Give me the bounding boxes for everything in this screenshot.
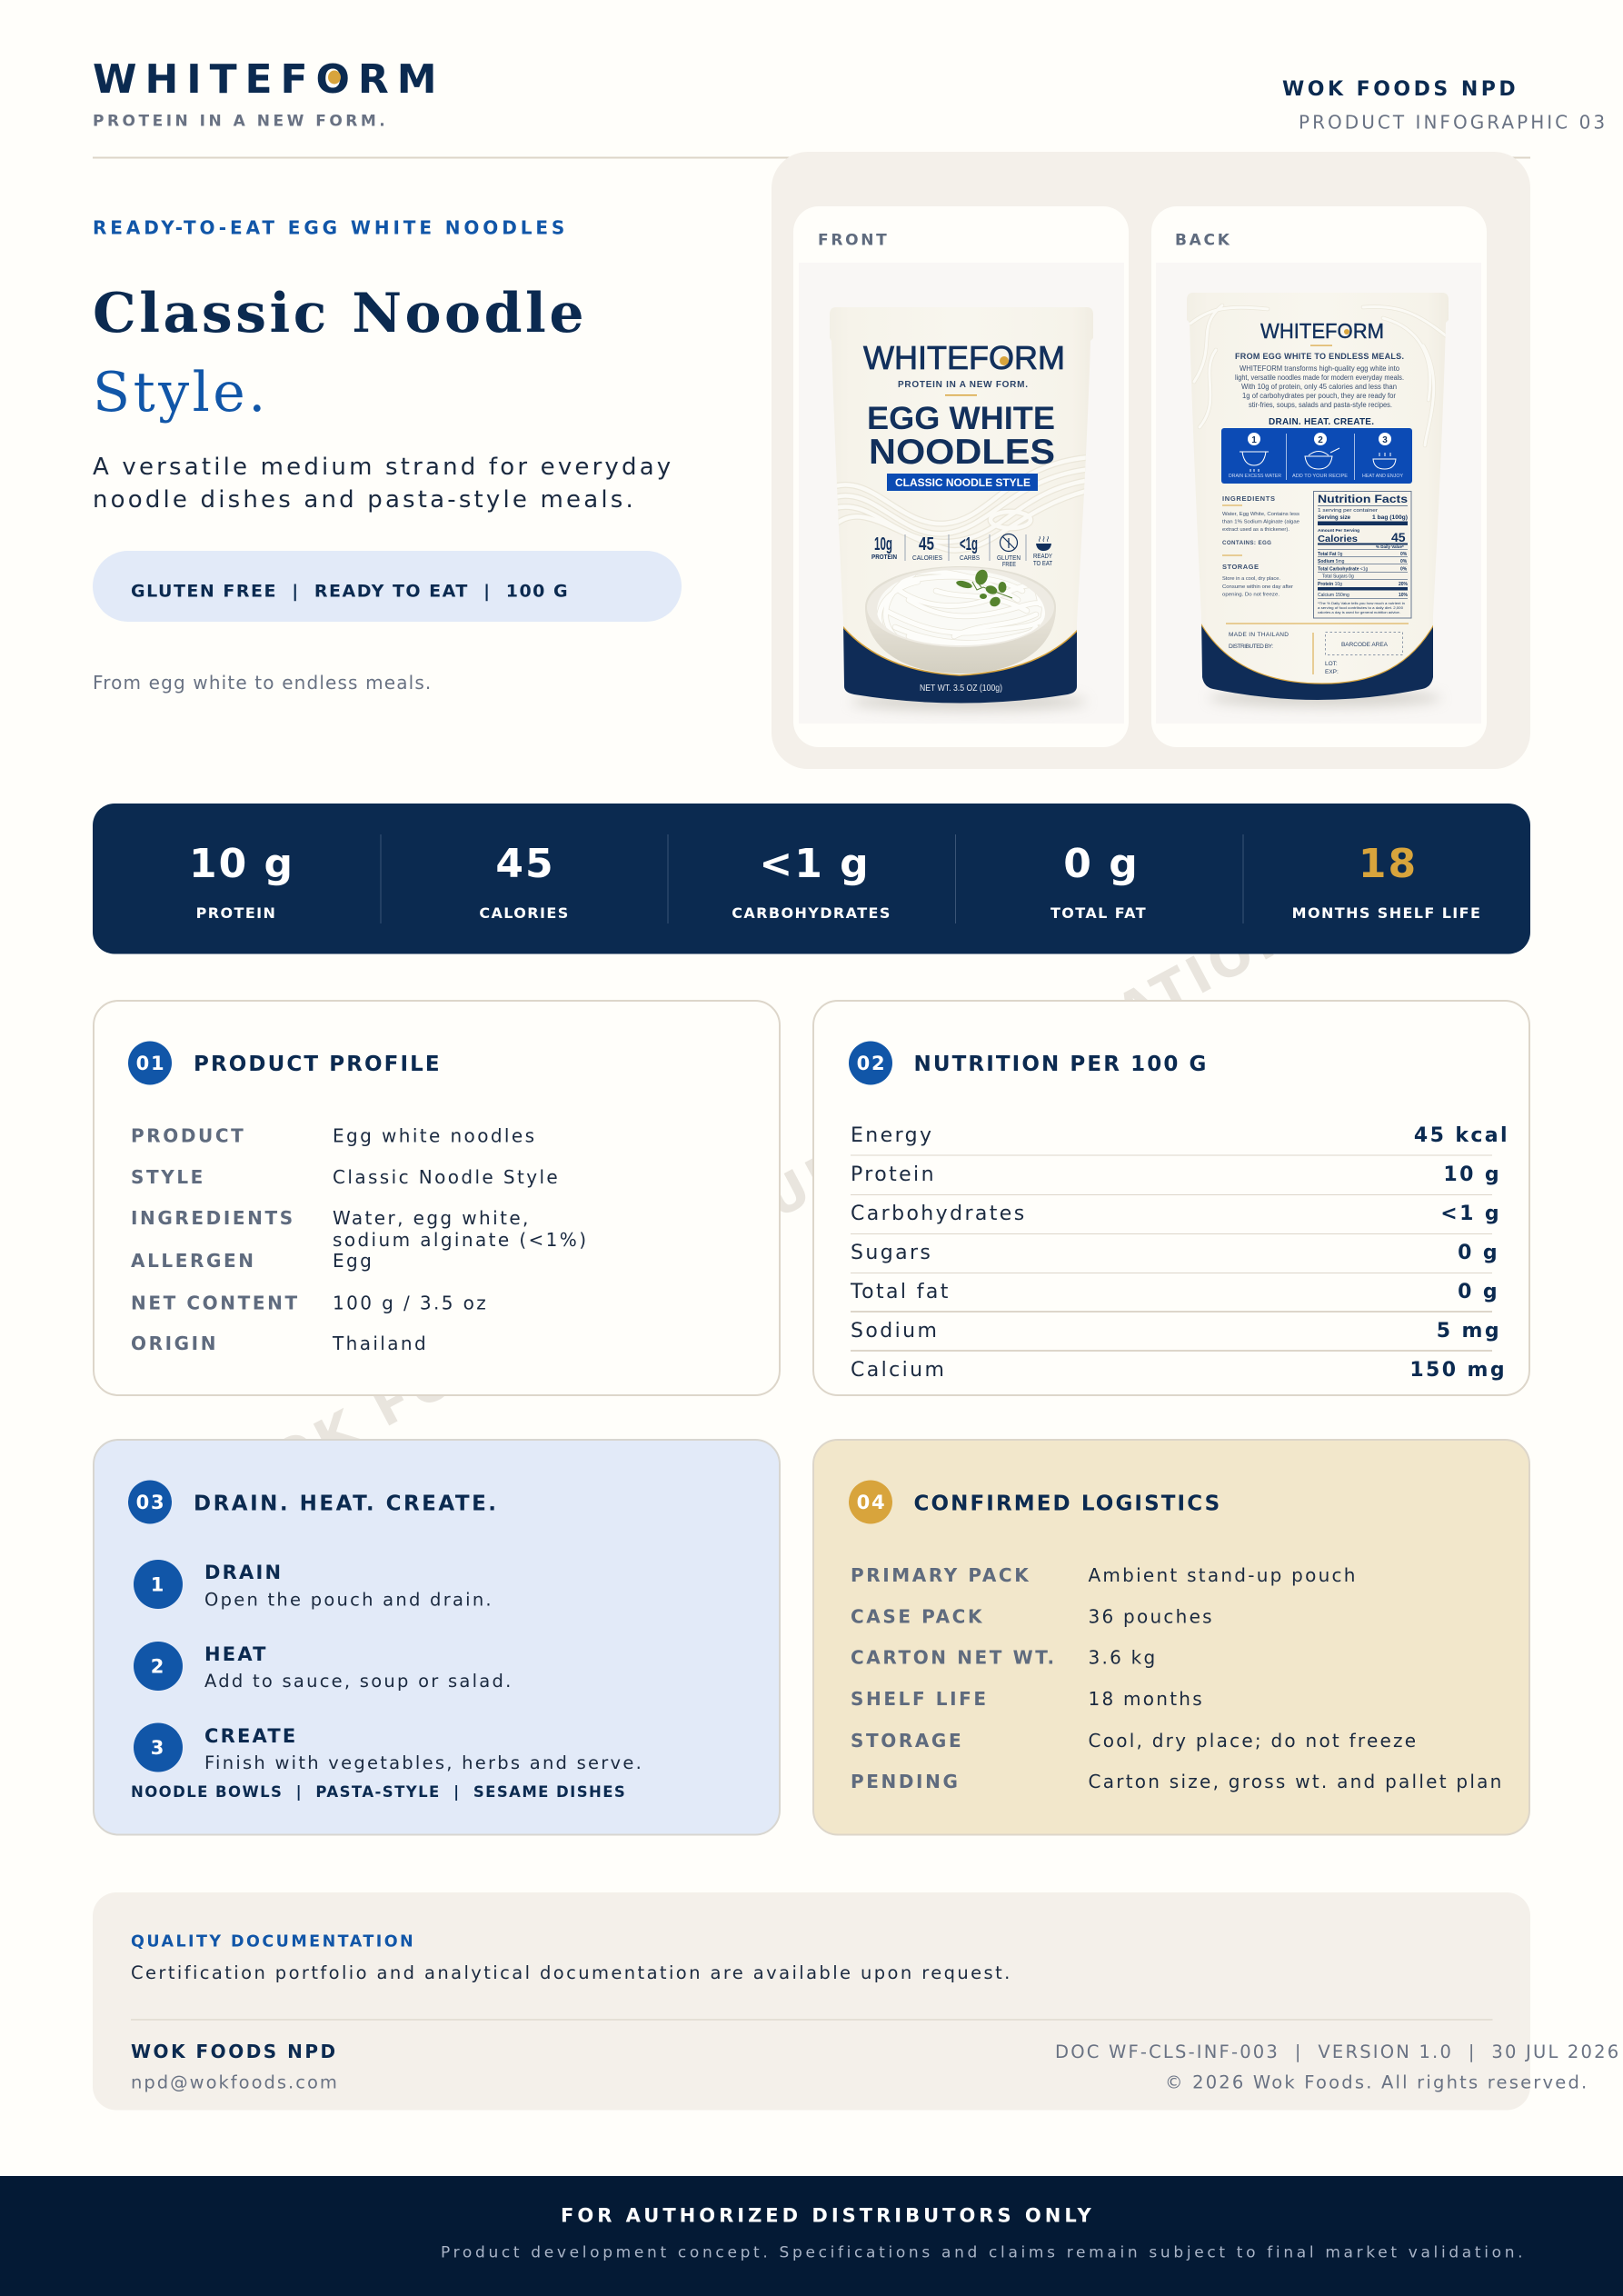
nutrition table: <1 g	[1440, 1203, 1501, 1225]
nutrition facts mini label: 45	[1391, 530, 1406, 544]
nutrition facts mini label	[1314, 491, 1411, 618]
icon: back pouch: 2	[1318, 435, 1323, 445]
logistics rows: Carton size, gross wt. and pallet plan	[1089, 1771, 1504, 1792]
spec rows: PRODUCT	[131, 1125, 245, 1147]
nutrition facts mini label: 10%	[1399, 593, 1409, 598]
stat: protein: 10 g	[189, 841, 294, 887]
nutrition table: Total fat	[850, 1281, 951, 1303]
noodle waves	[831, 457, 1090, 550]
nutrition table: 0 g	[1458, 1281, 1499, 1303]
ingredients: CONTAINS: EGG	[1222, 540, 1271, 546]
ingredients: Store in a cool, dry place.	[1222, 576, 1280, 582]
logistics rows: PRIMARY PACK	[851, 1564, 1031, 1586]
icon: back pouch: MADE IN THAILAND	[1229, 632, 1289, 638]
document meta	[1055, 2041, 1620, 2092]
section label: QUALITY DOCUMENTATION	[131, 1932, 415, 1951]
nutrition facts mini label: Sodium 5mg	[1318, 559, 1345, 564]
icon: front pouch: NET WT. 3.5 OZ (100g)	[920, 683, 1002, 694]
ingredients	[1222, 494, 1299, 598]
nutrition facts mini label: Calcium 150mg	[1318, 593, 1349, 598]
contact: WOK FOODS NPD	[131, 2041, 338, 2062]
ingredients: INGREDIENTS	[1222, 494, 1275, 503]
nutrition facts mini label: Total Carbohydrate <1g	[1318, 567, 1369, 573]
nutrition table: 10 g	[1443, 1163, 1501, 1186]
step 3: 3	[151, 1737, 165, 1759]
logistics rows: 36 pouches	[1089, 1605, 1214, 1627]
badge 03	[128, 1480, 172, 1523]
ingredients: extract used as a thickener).	[1222, 527, 1289, 533]
card: back	[1151, 206, 1487, 747]
icon: front pouch	[822, 300, 1100, 718]
icon: back pouch: WHITEFORM transforms high-quality egg white into	[1240, 364, 1400, 373]
icon: back pouch: DRAIN EXCESS WATER	[1229, 474, 1281, 479]
bowl of noodles	[865, 566, 1056, 674]
ingredients: Water, Egg White, Contains less	[1222, 512, 1299, 517]
claims strip: GLUTEN	[997, 555, 1021, 562]
card: back: BACK	[1175, 231, 1232, 249]
step 1: 1	[151, 1574, 165, 1596]
stat: total fat: TOTAL FAT	[1050, 904, 1147, 922]
nutrition facts mini label: % Daily Value*	[1376, 544, 1404, 549]
logistics rows: Cool, dry place; do not freeze	[1089, 1730, 1418, 1752]
spec rows: INGREDIENTS	[131, 1207, 295, 1229]
panel: 01 product profile	[94, 1001, 780, 1395]
stat: protein	[189, 841, 294, 922]
herb garnish	[955, 568, 1012, 608]
icon: back pouch: ADD TO YOUR RECIPE	[1292, 474, 1349, 479]
hero text block: noodle dishes and pasta-style meals.	[93, 486, 636, 514]
nutrition facts mini label: Protein 10g	[1318, 582, 1342, 587]
icon: back pouch	[1181, 286, 1454, 718]
navy base	[843, 627, 1077, 704]
stat: shelf life: MONTHS SHELF LIFE	[1292, 904, 1481, 922]
preparation strip	[1221, 428, 1412, 484]
icon: front pouch: EGG WHITE	[867, 401, 1055, 436]
ingredients: Consume within one day after	[1222, 584, 1293, 590]
nutrition facts mini label: 0%	[1400, 559, 1408, 564]
spec rows: 100 g / 3.5 oz	[333, 1293, 488, 1314]
step 1	[134, 1560, 493, 1611]
logistics rows: 3.6 kg	[1089, 1647, 1157, 1669]
watermark: WOK FOODS NPD SUPPORT NOTATION	[209, 898, 1309, 1521]
wordmark: WHITEFORM	[93, 56, 444, 103]
stat: calories: 45	[495, 841, 555, 887]
nutrition facts mini label: Total Sugars 0g	[1322, 574, 1354, 580]
hero text block: Style.	[93, 361, 269, 424]
heading: NUTRITION PER 100 G	[914, 1053, 1209, 1076]
step 1: Open the pouch and drain.	[204, 1589, 493, 1611]
document meta: © 2026 Wok Foods. All rights reserved.	[1165, 2072, 1588, 2092]
logistics rows	[851, 1564, 1504, 1792]
step 3: CREATE	[204, 1725, 297, 1747]
logistics rows: CASE PACK	[851, 1605, 984, 1627]
nutrition facts mini label: Nutrition Facts	[1318, 493, 1408, 505]
spec rows: Water, egg white,	[333, 1207, 531, 1229]
brand: WHITEFORM	[863, 339, 1065, 376]
spec rows: Egg white noodles	[333, 1125, 536, 1147]
logistics rows: PENDING	[851, 1771, 960, 1792]
badge 01: 01	[136, 1053, 165, 1074]
nutrition facts mini label: Serving size	[1318, 514, 1351, 521]
heading: PRODUCT PROFILE	[194, 1053, 442, 1076]
claims strip: PROTEIN	[871, 554, 897, 561]
claims strip	[871, 534, 1053, 568]
logistics rows: CARTON NET WT.	[851, 1647, 1057, 1669]
ingredients: opening. Do not freeze.	[1222, 593, 1279, 598]
claims strip: 10g	[874, 534, 892, 554]
step 3: Finish with vegetables, herbs and serve.	[204, 1752, 643, 1773]
stats bar	[93, 804, 1530, 954]
icon: back pouch: DISTRIBUTED BY:	[1229, 644, 1273, 650]
ingredients: than 1% Sodium Alginate (algae	[1222, 520, 1299, 525]
claims strip: READY	[1033, 554, 1052, 560]
stat: calories: CALORIES	[479, 904, 570, 922]
stat: carbohydrates	[732, 841, 891, 922]
nutrition table: 5 mg	[1437, 1320, 1501, 1343]
small note: From egg white to endless meals.	[93, 672, 432, 694]
nutrition facts mini label: calories a day is used for general nutrition advice.	[1318, 611, 1400, 614]
nutrition table: 0 g	[1458, 1242, 1499, 1264]
spec rows: ORIGIN	[131, 1333, 218, 1354]
badge 02: 02	[857, 1053, 886, 1074]
step 2: 2	[151, 1656, 165, 1678]
icon: back pouch: DRAIN. HEAT. CREATE.	[1269, 417, 1374, 427]
card: front	[793, 206, 1129, 747]
usage tags: NOODLE BOWLS | PASTA-STYLE | SESAME DISHES	[131, 1783, 626, 1802]
spec rows: Egg	[333, 1250, 373, 1272]
eyebrow: READY-TO-EAT EGG WHITE NOODLES	[93, 216, 568, 238]
step 2	[134, 1642, 513, 1692]
nutrition facts mini label: Calories	[1318, 534, 1358, 544]
claims strip: <1g	[960, 534, 978, 554]
ingredients: STORAGE	[1222, 563, 1259, 571]
badge 01	[128, 1042, 172, 1085]
logistics rows: STORAGE	[851, 1730, 963, 1752]
step 2: HEAT	[204, 1643, 268, 1665]
icon: back pouch: BARCODE AREA	[1341, 642, 1389, 648]
icon: back pouch: EXP:	[1325, 669, 1339, 675]
footer band: Product development concept. Specifications and claims remain subject to final market validation.	[441, 2243, 1526, 2261]
nutrition table: Calcium	[851, 1359, 946, 1382]
claims strip: FREE	[1002, 562, 1016, 568]
nutrition facts mini label: 1 serving per container	[1318, 508, 1378, 514]
badge 03: 03	[136, 1492, 165, 1513]
step 3	[134, 1723, 643, 1773]
nutrition facts mini label: *The % Daily Value tells you how much a nutrient in	[1318, 602, 1405, 605]
heading: DRAIN. HEAT. CREATE.	[194, 1492, 499, 1516]
hero text block	[93, 216, 682, 694]
nutrition table: Sodium	[851, 1320, 939, 1343]
card: front: FRONT	[818, 231, 889, 249]
statement: Certification portfolio and analytical documentation are available upon request.	[131, 1962, 1012, 1983]
nutrition table: Energy	[851, 1124, 933, 1147]
description: A versatile medium strand for everyday	[93, 454, 673, 481]
stat: carbohydrates: CARBOHYDRATES	[732, 904, 891, 922]
nutrition table: Protein	[851, 1163, 936, 1186]
panel: 03 preparation	[94, 1440, 780, 1834]
icon: back pouch: HEAT AND ENJOY	[1362, 474, 1404, 479]
nutrition table	[850, 1124, 1509, 1382]
contact	[131, 2041, 339, 2092]
title: Classic Noodle	[93, 282, 587, 345]
nutrition table: 150 mg	[1409, 1359, 1507, 1382]
stat: total fat: 0 g	[1063, 841, 1140, 887]
icon: front pouch: NOODLES	[869, 433, 1055, 472]
nutrition table: 45 kcal	[1414, 1124, 1509, 1147]
spec rows: ALLERGEN	[131, 1250, 256, 1272]
nutrition facts mini label: 20%	[1399, 582, 1409, 587]
icon: egg yolk in logo	[328, 71, 341, 84]
spec rows: Classic Noodle Style	[333, 1166, 560, 1188]
stat: carbohydrates: <1 g	[759, 841, 871, 887]
nutrition facts mini label: 1 bag (100g)	[1372, 514, 1408, 521]
icon: back pouch: 1	[1251, 435, 1257, 445]
badge 02	[849, 1042, 892, 1085]
footer band	[0, 2176, 1623, 2296]
claims strip: CARBS	[960, 555, 980, 562]
icon: back pouch: light, versatile noodles made for modern everyday meals.	[1235, 374, 1404, 382]
contact: npd@wokfoods.com	[131, 2072, 339, 2092]
header: brand	[93, 56, 444, 131]
nutrition facts mini label: Amount Per Serving	[1318, 528, 1359, 534]
panel: quality documentation	[93, 1892, 1620, 2111]
stat: shelf life: 18	[1359, 841, 1418, 887]
nutrition table: Sugars	[851, 1242, 932, 1264]
icon: back pouch: WHITEFORM	[1260, 319, 1384, 343]
claims strip: 45	[919, 534, 934, 554]
nutrition facts mini label: a serving of food contributes to a daily diet. 2,000	[1318, 606, 1403, 610]
badge 04	[849, 1480, 892, 1523]
tagline: PROTEIN IN A NEW FORM.	[93, 113, 388, 131]
step 2: Add to sauce, soup or salad.	[204, 1671, 513, 1692]
panel: 02 nutrition	[813, 1001, 1529, 1395]
icon: back pouch: FROM EGG WHITE TO ENDLESS MEALS.	[1235, 352, 1404, 361]
logistics rows: 18 months	[1089, 1688, 1204, 1710]
nutrition facts mini label: Total Fat 0g	[1318, 552, 1343, 557]
spec rows: Thailand	[332, 1333, 428, 1354]
heading: CONFIRMED LOGISTICS	[914, 1492, 1221, 1516]
stat: shelf life	[1292, 841, 1481, 922]
document meta: DOC WF-CLS-INF-003 | VERSION 1.0 | 30 JUL 2026	[1055, 2041, 1620, 2062]
claims strip: CALORIES	[912, 555, 942, 562]
icon: back pouch: stir-fries, soups, salads and pasta-style recipes.	[1249, 401, 1392, 409]
header: company: PRODUCT INFOGRAPHIC 03	[1299, 111, 1608, 133]
icon: back pouch: With 10g of protein, only 45 calories and less than	[1241, 383, 1397, 391]
icon: back pouch: LOT:	[1325, 661, 1338, 667]
icon: front pouch: PROTEIN IN A NEW FORM.	[898, 380, 1028, 390]
logistics rows: Ambient stand-up pouch	[1089, 1564, 1358, 1586]
stat: calories	[479, 841, 570, 922]
spec rows	[131, 1125, 588, 1354]
nutrition facts mini label: 0%	[1400, 552, 1408, 557]
pill badge	[93, 551, 682, 622]
header: company	[1282, 78, 1608, 133]
nutrition table: Carbohydrates	[851, 1203, 1027, 1225]
step 1: DRAIN	[204, 1562, 283, 1583]
spec rows: sodium alginate (<1%)	[333, 1229, 588, 1251]
badge 04: 04	[857, 1492, 886, 1513]
panel: pack images	[772, 152, 1530, 769]
nutrition facts mini label: 0%	[1400, 567, 1408, 573]
header: company: WOK FOODS NPD	[1282, 78, 1518, 101]
logistics rows: SHELF LIFE	[851, 1688, 989, 1710]
panel: 04 logistics	[813, 1440, 1529, 1834]
claims strip: TO EAT	[1033, 561, 1053, 567]
spec rows: STYLE	[131, 1166, 205, 1188]
icon: back pouch: 3	[1382, 435, 1388, 445]
stat: protein: PROTEIN	[196, 904, 276, 922]
hero text block: GLUTEN FREE | READY TO EAT | 100 G	[131, 582, 569, 602]
icon: front pouch: CLASSIC NOODLE STYLE	[895, 476, 1031, 489]
stat: total fat	[1050, 841, 1147, 922]
icon: back pouch: 1g of carbohydrates per pouch, they are ready for	[1242, 392, 1396, 400]
spec rows: NET CONTENT	[131, 1293, 300, 1314]
footer band: FOR AUTHORIZED DISTRIBUTORS ONLY	[561, 2205, 1095, 2227]
